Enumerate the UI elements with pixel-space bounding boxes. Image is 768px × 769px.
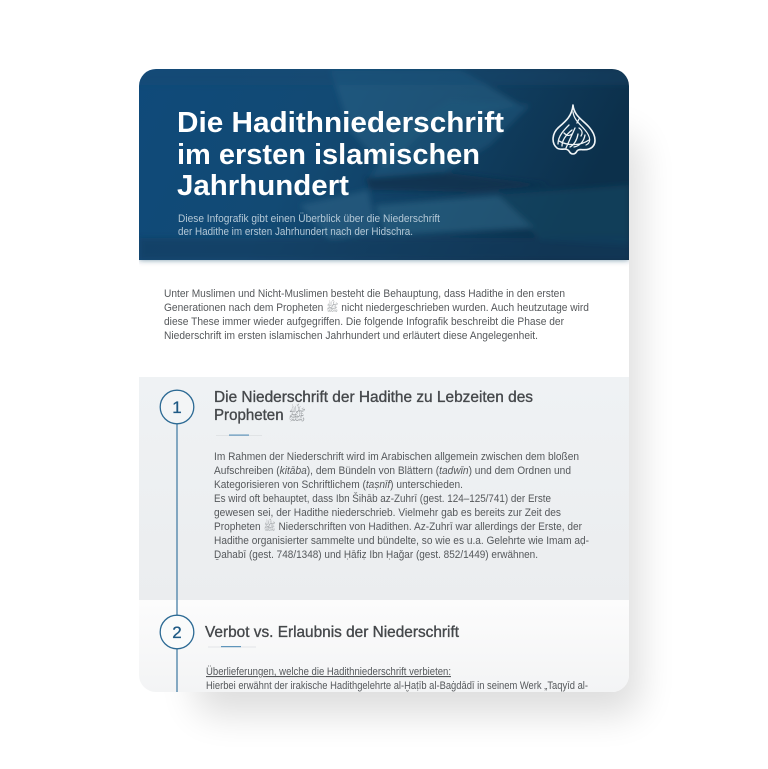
section 2 body text: Hierbei erwähnt der irakische Hadithgelehrte al-Ḫaṭīb al-Baġdādī in seinem Werk „Taqyīd al-: [206, 680, 588, 692]
section 1 body text: Aufschreiben (kitāba), dem Bündeln von Blättern (tadwīn) und dem Ordnen und: [214, 465, 571, 477]
section 2 body text: Überlieferungen, welche die Hadithniederschrift verbieten:: [206, 666, 451, 678]
subtitle: [178, 213, 440, 238]
section 1 body text: Ḏahabī (gest. 748/1348) und Ḥāfiẓ Ibn Ḥaǧar (gest. 852/1449) erwähnen.: [214, 549, 538, 561]
section 1 body text: Propheten ﷺ Niederschriften von Hadithen. Az-Zuhrī war allerdings der Erste, der: [214, 518, 582, 533]
section 2 background: [139, 651, 629, 692]
title: Die Hadithniederschrift: [177, 107, 505, 139]
section 2 heading underline: [208, 646, 256, 648]
section 1 body text: Kategorisieren von Schriftlichem (taṣnīf) unterschieden.: [214, 479, 463, 491]
infographic card: [139, 69, 629, 692]
card shadow: [195, 135, 640, 715]
intro paragraph: Unter Muslimen und Nicht-Muslimen besteht die Behauptung, dass Hadithe in den ersten: [164, 288, 565, 300]
title: im ersten islamischen: [177, 139, 480, 171]
title: Jahrhundert: [177, 170, 350, 202]
section 1 body text: Hadithe organisierter sammelte und bündelte, so wie es u.a. Gelehrte wie Imam aḍ-: [214, 535, 589, 547]
section 1 heading: [214, 389, 533, 424]
step marker 1: 1: [172, 398, 182, 417]
title: [178, 111, 504, 196]
subtitle: der Hadithe im ersten Jahrhundert nach der Hidschra.: [178, 226, 413, 238]
step marker 1: [160, 390, 194, 424]
banner background with blurred open book: [139, 69, 629, 260]
step marker 2: 2: [172, 623, 182, 642]
section 1 heading: Die Niederschrift der Hadithe zu Lebzeiten des: [214, 389, 533, 406]
intro paragraph: Niederschrift im ersten islamischen Jahrhundert und erläutert diese Angelegenheit.: [164, 330, 538, 342]
panel: section 2: [139, 625, 629, 692]
intro paragraph: [164, 288, 589, 342]
section 1 body text: gewesen sei, der Hadithe niederschrieb. Vielmehr gab es bereits zur Zeit des: [214, 507, 561, 519]
section 1 heading underline: [216, 434, 262, 436]
intro paragraph: Generationen nach dem Propheten ﷺ nicht niedergeschrieben wurden. Auch heutzutage wird: [164, 299, 589, 314]
subtitle: Diese Infografik gibt einen Überblick über die Niederschrift: [178, 213, 440, 225]
step marker 2: [160, 615, 194, 649]
section 1 body text: Es wird oft behauptet, dass Ibn Šihāb az-Zuhrī (gest. 124–125/741) der Erste: [214, 492, 551, 505]
section 1 background: [139, 377, 629, 600]
section 2 body text: [206, 666, 588, 692]
section 1 heading: Propheten ﷺ: [214, 403, 306, 424]
timeline connector: [176, 424, 178, 692]
icon: calligraphy teardrop logo: [553, 105, 595, 154]
panel: section 1: [139, 377, 629, 600]
section 1 body text: Im Rahmen der Niederschrift wird im Arabischen allgemein zwischen dem bloßen: [214, 451, 579, 463]
section 1 body text: [214, 451, 589, 561]
header banner: [139, 69, 629, 260]
section 2 heading: Verbot vs. Erlaubnis der Niederschrift: [205, 624, 460, 641]
intro paragraph: diese These immer wieder aufgegriffen. Die folgende Infografik beschreibt die Phase der: [164, 316, 564, 328]
